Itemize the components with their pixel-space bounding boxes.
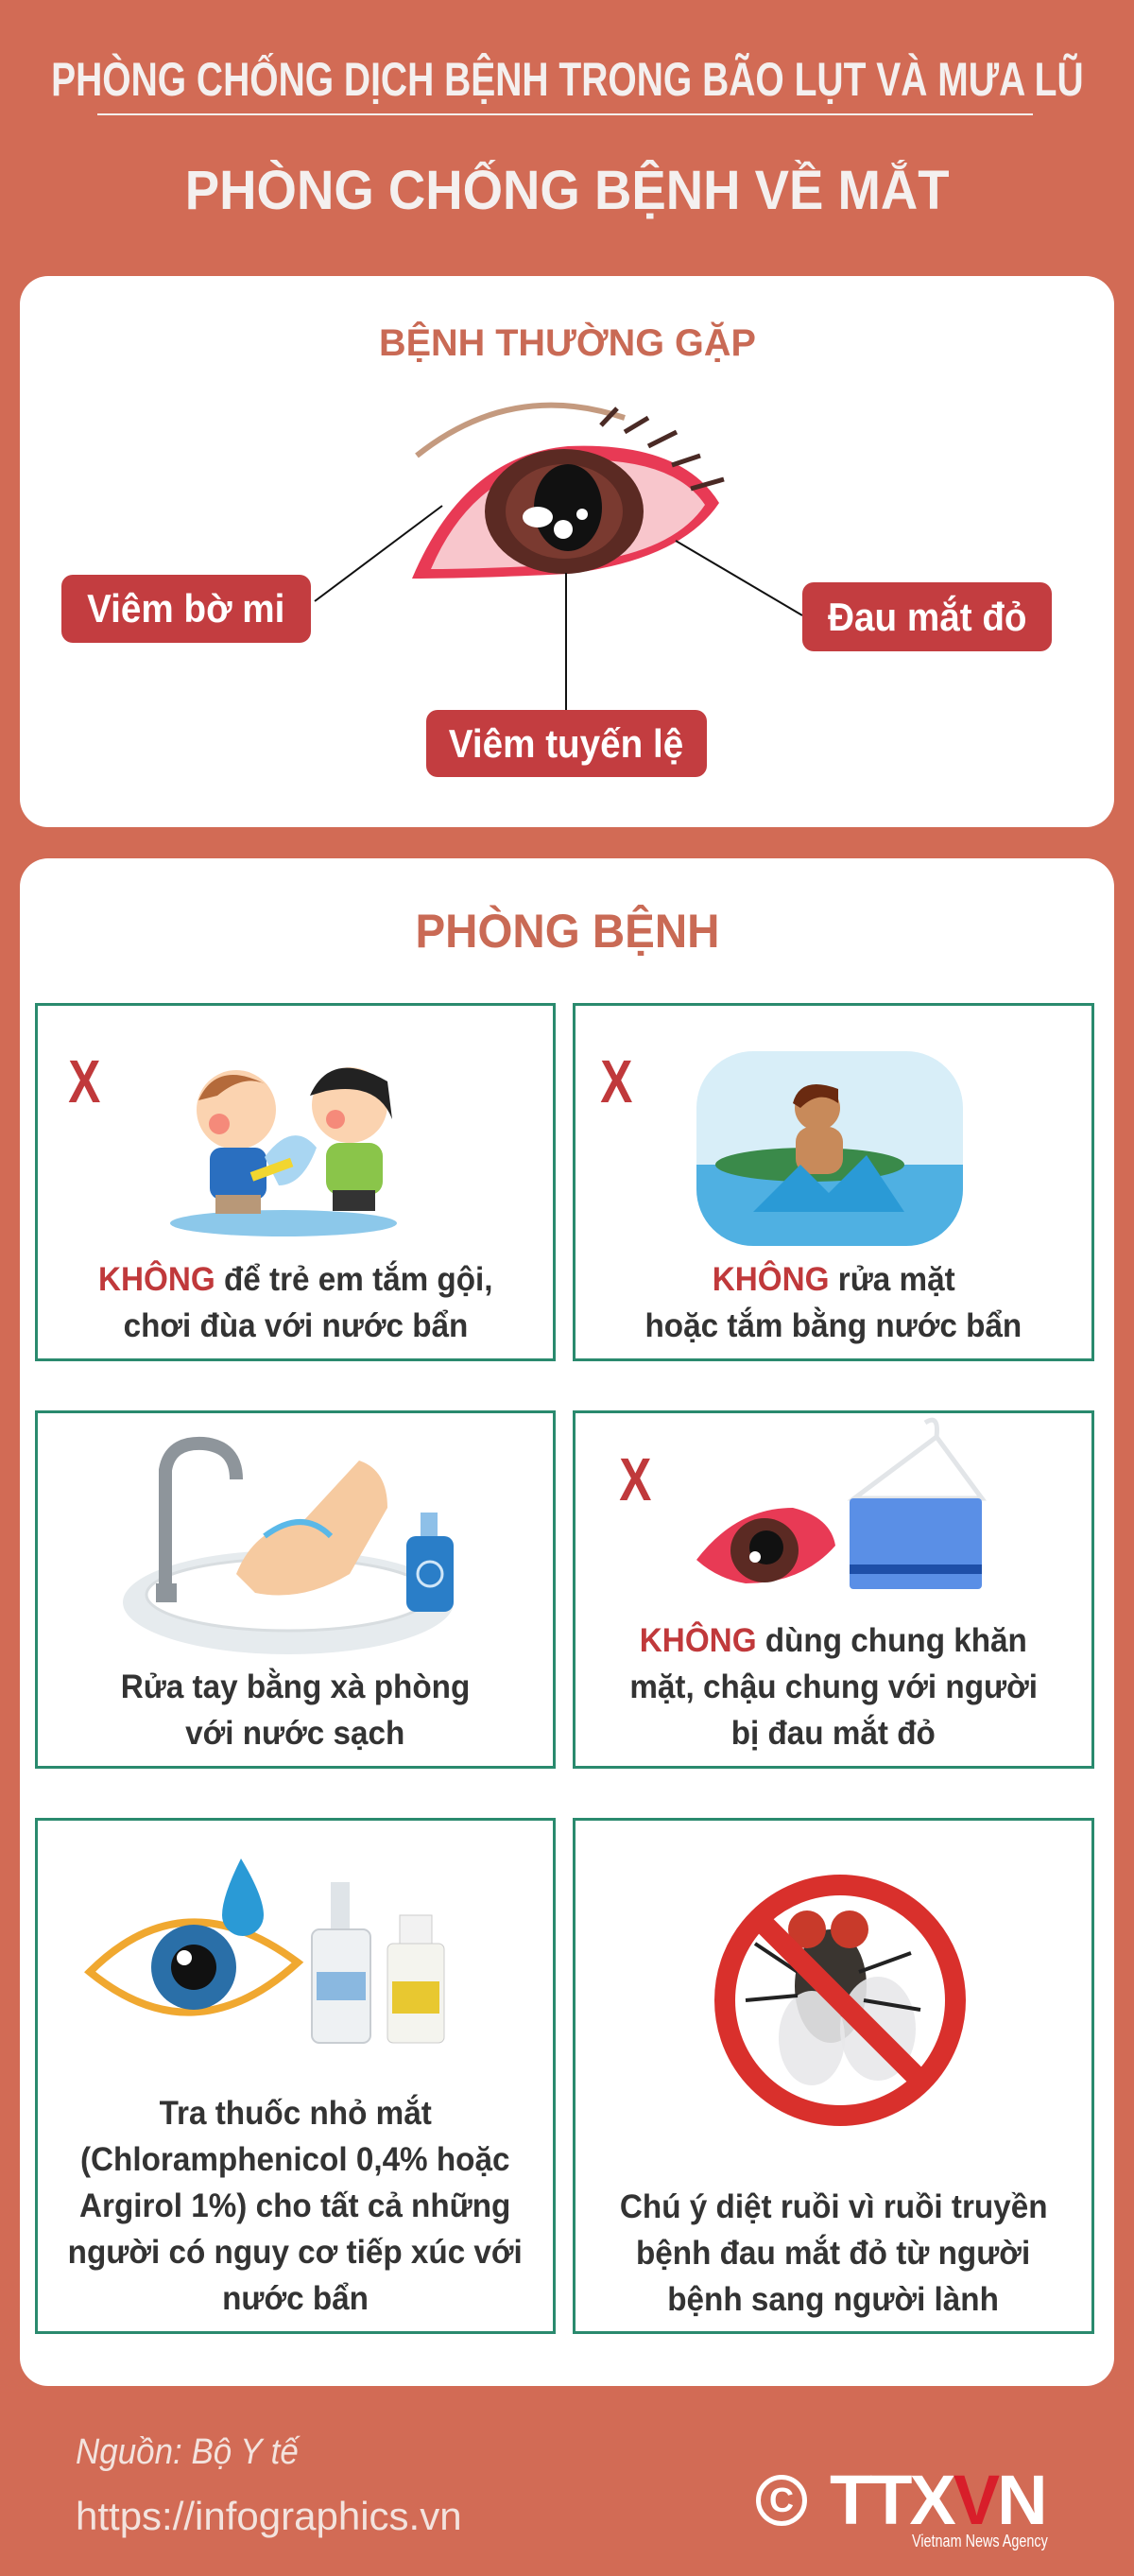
footer: source: Nguồn: Bộ Y tế	[76, 2432, 299, 2472]
text: bị đau mắt đỏ	[731, 1715, 936, 1752]
text	[68, 2095, 523, 2317]
icon: red X: X	[619, 1445, 651, 1513]
title: top heading: PHÒNG CHỐNG DỊCH BỆNH TRONG BÃO LỤT VÀ MƯA LŨ	[51, 53, 1083, 106]
panel: prevention	[20, 858, 1114, 2386]
text: KHÔNG rửa mặt	[713, 1261, 954, 1298]
text: bệnh sang người lành	[668, 2281, 999, 2318]
heading: common diseases: BỆNH THƯỜNG GẶP	[379, 322, 755, 364]
icon: red X: X	[600, 1047, 632, 1115]
text: (Chloramphenicol 0,4% hoặc	[80, 2141, 510, 2178]
card: no washing face in dirty water	[573, 1003, 1094, 1361]
text: với nước sạch	[185, 1715, 405, 1752]
card: eye drops	[35, 1818, 556, 2334]
card: no sharing towels	[573, 1410, 1094, 1769]
panel: common diseases	[20, 276, 1114, 827]
logo: TTXVN: C	[769, 2481, 794, 2519]
illustration: handwashing at sink	[123, 1437, 454, 1654]
label: conjunctivitis: Đau mắt đỏ	[828, 595, 1026, 639]
label: blepharitis: Viêm bờ mi	[87, 586, 285, 631]
title: main heading: PHÒNG CHỐNG BỆNH VỀ MẮT	[185, 160, 949, 221]
illustration: kids splashing	[170, 1067, 397, 1236]
text	[629, 1621, 1038, 1752]
text	[620, 2188, 1047, 2318]
text	[98, 1260, 492, 1344]
text: người có nguy cơ tiếp xúc với	[68, 2234, 523, 2271]
label: conjunctivitis	[802, 582, 1052, 651]
text: bệnh đau mắt đỏ từ người	[636, 2235, 1031, 2272]
text: KHÔNG để trẻ em tắm gội,	[98, 1261, 492, 1298]
text: mặt, chậu chung với người	[629, 1668, 1038, 1705]
illustration: boy swimming	[696, 1051, 963, 1246]
text: hoặc tắm bằng nước bẩn	[645, 1307, 1022, 1344]
eye illustration with connector lines	[314, 403, 802, 710]
text: KHÔNG dùng chung khăn	[640, 1622, 1027, 1659]
card: kill flies	[573, 1818, 1094, 2334]
logo: TTXVN	[756, 2461, 1048, 2550]
text: nước bẩn	[222, 2280, 369, 2317]
label: dacryoadenitis: Viêm tuyến lệ	[449, 721, 684, 766]
heading: prevention: PHÒNG BỆNH	[415, 905, 719, 958]
logo: TTXVN: Vietnam News Agency	[912, 2532, 1048, 2550]
text: Tra thuốc nhỏ mắt	[159, 2095, 432, 2132]
label: dacryoadenitis	[426, 710, 707, 777]
card: wash hands with soap	[35, 1410, 556, 1769]
logo: TTXVN: TTXVN	[830, 2461, 1045, 2539]
text: Rửa tay bằng xà phòng	[121, 1668, 470, 1705]
text: Chú ý diệt ruồi vì ruồi truyền	[620, 2188, 1047, 2225]
text: Argirol 1%) cho tất cả những	[79, 2187, 511, 2224]
footer: url: https://infographics.vn	[76, 2494, 462, 2538]
text: chơi đùa với nước bẩn	[123, 1307, 468, 1344]
text	[645, 1260, 1022, 1344]
label: blepharitis	[61, 575, 311, 643]
illustration: red eye and towel	[696, 1418, 987, 1589]
text	[121, 1668, 470, 1752]
icon: red X: X	[68, 1047, 100, 1115]
illustration: eye with drop and bottles	[84, 1859, 444, 2044]
icon: no-fly sign	[714, 1875, 966, 2126]
card: no children playing in dirty water	[35, 1003, 556, 1361]
